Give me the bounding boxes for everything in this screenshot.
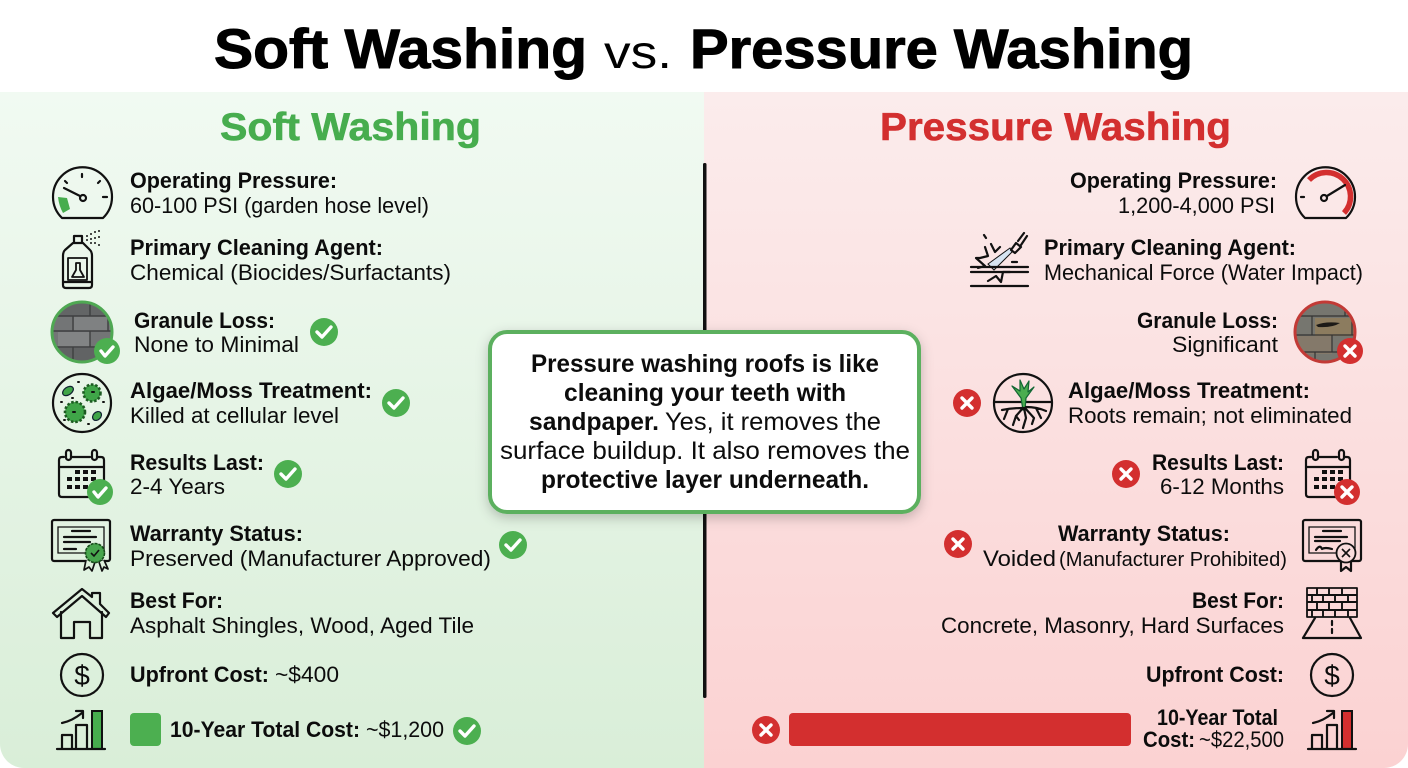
text: warranty status: Voided [983, 546, 1056, 571]
row: best for [53, 588, 474, 638]
icon: dollar coin [61, 654, 103, 696]
text: upfront cost: Upfront Cost: [1146, 662, 1284, 687]
text: granule loss: Granule Loss: [134, 308, 275, 333]
row: upfront cost [61, 654, 339, 696]
text: algae and moss treatment: Algae/Moss Treatment: [130, 378, 372, 403]
text: warranty status: Warranty Status: [130, 521, 303, 546]
text: best for: Best For: [1192, 588, 1284, 613]
callout text: surface buildup. It also removes the [500, 437, 910, 465]
text: algae and moss treatment [130, 378, 372, 428]
row: warranty status [944, 520, 1361, 571]
row: granule loss [50, 300, 338, 364]
icon: check [274, 460, 302, 488]
row: ten year total cost [752, 705, 1356, 752]
icon: low pressure gauge [53, 167, 112, 218]
bar: small cost [130, 713, 161, 746]
icon: x badge [1337, 338, 1363, 364]
title [214, 17, 1193, 80]
row: algae and moss treatment [953, 374, 1352, 432]
text: algae and moss treatment [1068, 378, 1352, 428]
text: granule loss: Significant [1172, 332, 1278, 357]
icon: x [953, 389, 981, 417]
text: warranty status: Warranty Status: [1058, 521, 1230, 546]
bar: large cost [789, 713, 1131, 746]
icon: rising bars [57, 711, 105, 749]
text: operating pressure [1070, 168, 1277, 218]
row: results last [1112, 450, 1360, 505]
icon: spray bottle [63, 231, 100, 288]
text: primary cleaning agent: Primary Cleaning Agent: [130, 235, 383, 260]
row: algae and moss treatment [53, 374, 410, 432]
icon: plant roots [994, 374, 1052, 432]
title: Soft Washing [214, 17, 587, 80]
text: operating pressure: 60-100 PSI (garden hose level) [130, 193, 429, 218]
text: ten year total cost: ~$22,500 [1199, 727, 1284, 752]
icon: x [1112, 460, 1140, 488]
text: ten year total cost: ~$1,200 [366, 717, 444, 742]
text: algae and moss treatment: Algae/Moss Treatment: [1068, 378, 1310, 403]
row: granule loss [1137, 300, 1363, 364]
row: warranty status [52, 520, 527, 571]
panel: pressure washing [704, 92, 1408, 768]
icon: void certificate [1303, 520, 1361, 571]
text: results last [130, 450, 264, 499]
heading: soft washing: Soft Washing [220, 106, 481, 149]
icon: calendar with x [1306, 450, 1360, 505]
text: primary cleaning agent: Chemical (Biocides/Surfactants) [130, 260, 451, 285]
icon: brick wall and road [1303, 588, 1361, 638]
icon: check badge [94, 338, 120, 364]
text: primary cleaning agent [1044, 235, 1363, 285]
text: best for: Asphalt Shingles, Wood, Aged Tile [130, 613, 474, 638]
text: granule loss [1137, 308, 1278, 357]
row: primary cleaning agent [971, 233, 1363, 286]
text: results last: 2-4 Years [130, 474, 225, 499]
callout text: Pressure washing roofs is like [531, 350, 879, 378]
text: granule loss: Granule Loss: [1137, 308, 1278, 333]
row: operating pressure [53, 167, 429, 218]
text: ten year total cost [1143, 705, 1284, 752]
icon: dollar coin: $ [1324, 660, 1340, 691]
icon: rising bars [1308, 711, 1356, 749]
text: primary cleaning agent: Mechanical Force (Water Impact) [1044, 260, 1363, 285]
text: algae and moss treatment: Killed at cellular level [130, 403, 339, 428]
icon: check [382, 389, 410, 417]
text: operating pressure: Operating Pressure: [130, 168, 337, 193]
text: upfront cost: Upfront Cost: [130, 662, 269, 687]
callout: sandpaper analogy [490, 332, 919, 512]
callout text: protective layer underneath. [541, 466, 869, 494]
text: results last [1152, 450, 1284, 499]
text: upfront cost [130, 662, 339, 687]
text: warranty status: (Manufacturer Prohibited) [1059, 549, 1287, 571]
panel: soft washing [0, 92, 704, 768]
icon: microbes [53, 374, 111, 432]
row: primary cleaning agent [63, 231, 451, 288]
text: granule loss [134, 308, 299, 357]
text: best for: Best For: [130, 588, 223, 613]
heading: pressure washing: Pressure Washing [880, 106, 1231, 149]
icon: damaged shingle photo [1294, 300, 1363, 364]
text: warranty status [983, 521, 1287, 571]
icon: house [53, 589, 109, 638]
row: ten year total cost [57, 711, 481, 749]
icon: high pressure gauge [1296, 167, 1355, 218]
icon: calendar with check [59, 450, 113, 505]
icon: x [944, 530, 972, 558]
row: best for [941, 588, 1361, 638]
text: best for [941, 588, 1284, 638]
text: operating pressure: Operating Pressure: [1070, 168, 1277, 193]
text: results last: Results Last: [130, 450, 264, 475]
icon: intact shingle photo [50, 300, 120, 364]
text: results last: Results Last: [1152, 450, 1284, 475]
text: algae and moss treatment: Roots remain; not eliminated [1068, 403, 1352, 428]
icon: x [752, 716, 780, 744]
text: ten year total cost: Cost: [1143, 727, 1195, 752]
text: warranty status [130, 521, 491, 571]
row: operating pressure [1070, 167, 1355, 218]
text: best for [130, 588, 474, 638]
icon: check [310, 318, 338, 346]
text: warranty status: Preserved (Manufacturer Approved) [130, 546, 491, 571]
icon: check [453, 717, 481, 745]
text: best for: Concrete, Masonry, Hard Surfaces [941, 613, 1284, 638]
center divider [703, 163, 706, 698]
icon: check [499, 531, 527, 559]
icon: dollar coin: $ [74, 660, 90, 691]
text: primary cleaning agent [130, 235, 451, 285]
row: upfront cost [1146, 654, 1353, 696]
title: vs. [604, 26, 672, 78]
text: operating pressure: 1,200-4,000 PSI [1118, 193, 1275, 218]
text: ten year total cost: 10-Year Total Cost: [170, 717, 360, 742]
icon: certificate with seal [52, 520, 110, 571]
text: primary cleaning agent: Primary Cleaning Agent: [1044, 235, 1296, 260]
text: granule loss: None to Minimal [134, 332, 299, 357]
text: upfront cost: ~$400 [275, 662, 339, 687]
icon: pressure nozzle blast [971, 233, 1028, 286]
text: ten year total cost: 10-Year Total [1157, 705, 1278, 730]
icon: dollar coin [1311, 654, 1353, 696]
row: results last [59, 450, 302, 505]
title: Pressure Washing [690, 17, 1193, 80]
callout text [500, 350, 910, 494]
text: results last: 6-12 Months [1160, 474, 1284, 499]
callout text: Yes, it removes the [665, 408, 881, 436]
callout text: cleaning your teeth with [564, 379, 846, 407]
text: operating pressure [130, 168, 429, 218]
callout text: sandpaper. [529, 408, 659, 436]
